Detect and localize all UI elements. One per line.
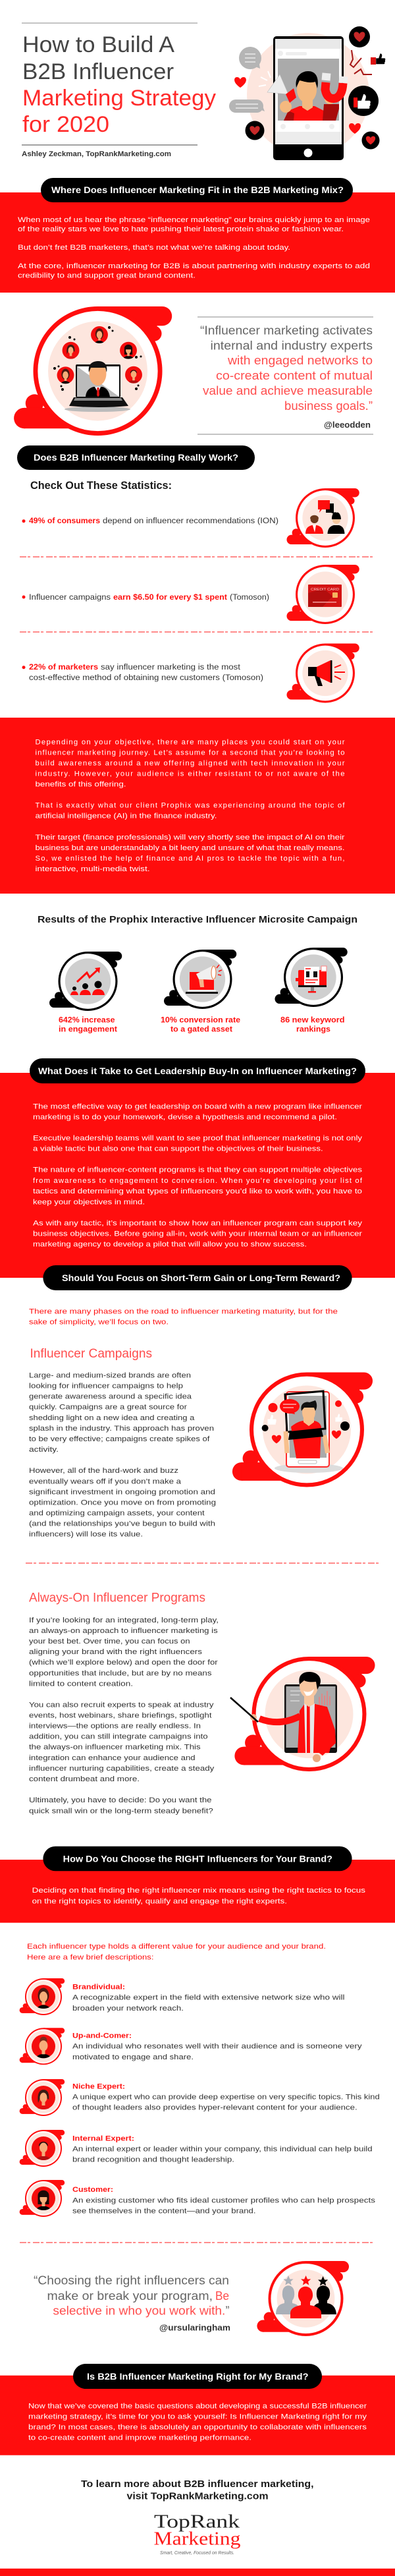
result 1: engagement [49, 952, 122, 1034]
section heading pill [43, 1846, 352, 1871]
laptop with speaker [65, 361, 130, 412]
text block: always-on [29, 1617, 219, 1815]
title: red lines: for 2020 [22, 112, 109, 137]
section heading pill: Where Does Influencer Marketing Fit in the B2B Marketing Mix? [51, 185, 344, 195]
call to action [81, 2478, 313, 2502]
stat 2: campaign earnings: earn $6.50 for every $1 spent [113, 592, 227, 602]
influencer type: Up-and-Comer: Up-and-Comer: [72, 2032, 132, 2040]
influencer type: Brandividual: Brandividual: [72, 1984, 125, 1991]
icon: three people with stars [257, 2261, 349, 2336]
section heading pill: short vs long term [43, 1265, 352, 1290]
subheading: Always-On Influencer Programs: Always-On Influencer Programs [29, 1591, 205, 1605]
stat 3: marketers [22, 662, 263, 682]
text block: always-on: interviews—the options are really endless. In [29, 1723, 201, 1731]
icon: growth chart with people [49, 952, 122, 1011]
influencer type: Customer [20, 2180, 375, 2217]
buy-in paragraphs: business objectives. Before going all-in, work with your internal team or an influencer [33, 1230, 362, 1238]
influencer type: Internal Expert [20, 2130, 373, 2167]
section heading pill: short vs long term: Should You Focus on Short-Term Gain or Long-Term Reward? [62, 1273, 340, 1283]
band text [32, 1887, 365, 1905]
case study paragraphs: Their target (finance professionals) will very shortly see the impact of AI on their [36, 834, 345, 842]
intro paragraphs [18, 216, 370, 279]
text block: campaigns: generate awareness around a specific idea [29, 1393, 192, 1401]
author byline: Ashley Zeckman, TopRankMarketing.com [22, 150, 171, 158]
icon: presenter with pointer and tablet [230, 1657, 375, 1771]
text block: always-on: If you’re looking for an integrated, long-term play, [29, 1617, 219, 1624]
text block: always-on: (which we’ll explore below) and open the door for [29, 1659, 218, 1667]
case study paragraphs: industry. However, your audience is either resistant to or not aware of the [36, 770, 344, 778]
text block: always-on: integration can enhance your audience and [29, 1754, 196, 1762]
quote text: value and achieve measurable [203, 384, 373, 397]
text block: campaigns: eventually wears off if you don’t make a [29, 1477, 182, 1485]
footer red band [0, 2569, 395, 2576]
logo: TopRank Marketing: TopRank [154, 2511, 240, 2533]
decorative divider [20, 631, 374, 633]
red intro text: There are many phases on the road to influencer marketing maturity, but for the [29, 1307, 338, 1315]
result label: rankings [296, 1025, 330, 1034]
call to action: visit TopRankMarketing.com [126, 2490, 269, 2502]
section heading pill: does it work: Does B2B Influencer Marketing Really Work? [34, 452, 238, 463]
magnet [325, 73, 344, 98]
influencer figure [280, 71, 339, 121]
decorative divider [26, 1562, 380, 1564]
text block: campaigns [29, 1371, 216, 1538]
buy-in paragraphs: a viable tactic but also one that can support the objectives of their business. [33, 1145, 323, 1153]
text block: campaigns: to be very effective; campaigns create spikes of [29, 1435, 210, 1443]
text block: always-on: limited to content creation. [29, 1680, 133, 1688]
quote text: Be [215, 2289, 229, 2303]
floating social icons [262, 1399, 350, 1443]
text block: campaigns: significant investment in ongoing promotion and [29, 1488, 215, 1496]
red band: intro section [0, 178, 395, 293]
tablet [284, 1684, 337, 1753]
band text: Now that we’ve covered the basic questions about developing a successful B2B influencer [28, 2402, 367, 2410]
stat 1: consumers [22, 516, 278, 525]
influencer type: Up-and-Comer [20, 2028, 362, 2065]
decorative divider [20, 2242, 374, 2243]
buy-in paragraphs: marketing agency to develop a pilot that will allow you to show success. [33, 1241, 307, 1249]
band text [28, 2402, 367, 2442]
band text: marketing strategy, it’s time for you to ask yourself: Is Influencer Marketing right for my [28, 2413, 367, 2421]
band text: to co-create content and improve marketing performance. [28, 2434, 251, 2442]
title: dark lines [22, 32, 174, 84]
result label: 642% increase [59, 1016, 115, 1025]
icon: thumbs up badges [348, 53, 385, 116]
small influencer avatars [57, 326, 142, 384]
text block: always-on: addition, you can still integrate campaigns into [29, 1733, 208, 1741]
stat 3: marketers: cost-effective method of obtaining new customers (Tomoson) [29, 673, 263, 682]
intro paragraphs: of the reality stars we love to hate pushing their latest protein shake or fashion wear. [18, 225, 344, 233]
stat 2: campaign earnings: Influencer campaigns [29, 592, 111, 602]
intro paragraphs: At the core, influencer marketing for B2B is about partnering with industry experts to add [18, 262, 370, 270]
icon: avatar [20, 2028, 65, 2065]
influencer type: Internal Expert: An internal expert or leader within your company, this individual can help build [72, 2145, 373, 2153]
section heading pill: does it work [17, 445, 255, 470]
text block: always-on: an always-on approach to influencer marketing is [29, 1627, 218, 1635]
quote text: internal and industry experts [211, 339, 373, 352]
case study paragraphs: So, we enlisted the help of finance and AI pros to tackle the topic with a fun, [36, 855, 344, 863]
pull quote: Ursula Ringham [34, 2274, 230, 2333]
intro paragraphs: But don’t fret B2B marketers, that’s not what we’re talking about today. [18, 244, 290, 252]
subheading: statistics: Check Out These Statistics: [30, 479, 172, 492]
section heading pill [41, 178, 353, 202]
title: dark lines: How to Build A [22, 32, 174, 57]
influencer type: Internal Expert: Internal Expert: [72, 2134, 134, 2142]
stat 2: campaign earnings [22, 592, 269, 602]
influencer type: Customer: An existing customer who fits ideal customer profiles who can help prospects [72, 2196, 375, 2204]
red band: leadership buy-in [0, 1058, 395, 1278]
quote text: co-create content of mutual [216, 369, 373, 382]
section heading pill [30, 1058, 365, 1083]
text block: always-on: content drumbeat and more. [29, 1775, 140, 1783]
influencer type: Brandividual [20, 1978, 344, 2015]
influencer type: Customer: Customer: [72, 2186, 113, 2194]
presenter [230, 1672, 336, 1762]
buy-in paragraphs: The most effective way to get leadership on board with a new program like influencer [33, 1102, 362, 1110]
icon: heart badges [234, 26, 379, 149]
result label [59, 1016, 117, 1034]
icon: credit card: CREDIT CARD [311, 588, 339, 592]
influencer type: Customer: see themselves in the content—and your brand. [72, 2208, 255, 2216]
quote text [34, 2274, 229, 2318]
case study paragraphs: influencer marketing journey. Let’s assume for a second that you’re looking to [36, 749, 345, 757]
icon: influencer network around laptop [14, 306, 172, 436]
text block: campaigns: and optimizing campaign assets, your content [29, 1509, 205, 1517]
influencer type: Niche Expert: Niche Expert: [72, 2082, 125, 2090]
icon: avatar [20, 2180, 65, 2217]
buy-in paragraphs: from awareness to engagement to conversion. When you’re developing your list of [33, 1177, 363, 1185]
text block: campaigns: quickly. Campaigns are a great source for [29, 1404, 187, 1412]
logo: TopRank Marketing: Marketing [154, 2529, 241, 2550]
quote text: make or break your program, [47, 2289, 213, 2303]
influencer type: Up-and-Comer: An individual who resonates well with their audience and is someone very [72, 2043, 362, 2051]
icon: laptop megaphone [164, 950, 236, 1009]
stat 1: consumers: depend on influencer recommendations (ION) [103, 516, 278, 525]
stat 3: marketers: 22% of marketers [29, 662, 98, 672]
text block: always-on: Ultimately, you have to decide: Do you want the [29, 1796, 212, 1804]
intro to influencer types [27, 1943, 326, 1961]
text block: campaigns: looking for influencer campaigns to help [29, 1383, 183, 1390]
title: red lines [22, 86, 216, 137]
quote text [200, 324, 373, 413]
stat 1: consumers: 49% of consumers [29, 516, 100, 525]
logo: TopRank Marketing [154, 2511, 241, 2556]
icon: monitor with article [275, 948, 348, 1007]
buy-in paragraphs: The nature of influencer-content programs is that they can support multiple objectives [33, 1166, 362, 1174]
icon: people talking [287, 488, 359, 548]
title block [22, 22, 216, 158]
section heading pill: Is B2B Influencer Marketing Right for My Brand? [87, 2371, 308, 2382]
text block: always-on: the always-on influencer marketing mix. This [29, 1744, 201, 1752]
intro to influencer types: Here are a few brief descriptions: [27, 1953, 154, 1961]
text block: campaigns: activity. [29, 1446, 59, 1454]
text block: campaigns: influencers) will lose its value. [29, 1530, 143, 1538]
result label: to a gated asset [171, 1025, 232, 1034]
intro paragraphs: credibility to and support great brand content. [18, 272, 196, 279]
phone [273, 36, 344, 160]
red band: choosing influencers [0, 1846, 395, 1923]
megaphone [259, 71, 296, 103]
intro to influencer types: Each influencer type holds a different value for your audience and your brand. [27, 1943, 326, 1951]
case study paragraphs [36, 738, 345, 873]
text block: always-on: You can also recruit experts to speak at industry [29, 1701, 214, 1709]
stat 3: marketers: say influencer marketing is the most [101, 662, 241, 672]
influencer type: Internal Expert: brand recognition and thought leadership. [72, 2156, 234, 2163]
icon: avatar [20, 2079, 65, 2116]
red band: Prophix case study [0, 718, 395, 894]
text block: always-on: your best bet. Over time, you can focus on [29, 1638, 190, 1646]
icon: credit card [287, 565, 359, 624]
quote handle: @leeodden [324, 420, 371, 430]
quote text: “Influencer marketing activates [200, 324, 373, 337]
buy-in paragraphs: As with any tactic, it’s important to show how an influencer program can support key [33, 1219, 362, 1227]
buy-in paragraphs: Executive leadership teams will want to see proof that influencer marketing is not only [33, 1135, 362, 1143]
quote text: ” [225, 2304, 229, 2318]
intro paragraphs: When most of us hear the phrase “influencer marketing” our brains quickly jump to an image [18, 216, 370, 224]
person with sign [286, 1400, 328, 1458]
influencer type: Brandividual: A recognizable expert in the field with extensive network size who will [72, 1994, 345, 2002]
influencer type: Niche Expert [20, 2079, 380, 2116]
hero illustration: phone with influencer [229, 26, 385, 160]
case study paragraphs: Depending on your objective, there are many places you could start on your [36, 738, 345, 746]
result 2: conversion [161, 950, 240, 1034]
result label: 10% conversion rate [161, 1016, 240, 1025]
text block: always-on: aligning your brand with the right influencers [29, 1648, 202, 1656]
influencer type: Niche Expert: of thought leaders also provides hyper-relevant content for your audience. [72, 2104, 357, 2112]
buy-in paragraphs: keep your objectives in mind. [33, 1198, 145, 1206]
result label [280, 1016, 345, 1034]
buy-in paragraphs: tactics and determining what types of influencers you’d like to work with, you have to [33, 1188, 362, 1195]
case study paragraphs: That is exactly what our client Prophix was experiencing around the topic of [36, 802, 345, 810]
quote text: selective in who you work with. [53, 2304, 225, 2318]
band text: on the right topics to identify, qualify and engage the right experts. [32, 1897, 287, 1905]
text block: always-on: opportunities that include, but are by no means [29, 1669, 212, 1677]
call to action: To learn more about B2B influencer marketing, [81, 2478, 313, 2490]
case study paragraphs: benefits of this offering. [36, 780, 126, 788]
influencer type: Up-and-Comer: motivated to engage and share. [72, 2053, 194, 2061]
band text: Deciding on that finding the right influencer mix means using the right tactics to focus [32, 1887, 365, 1895]
heading: campaign results: Results of the Prophix Interactive Influencer Microsite Campaign [38, 914, 357, 925]
phone [285, 1391, 329, 1467]
quote text: with engaged networks to [227, 354, 373, 367]
text block: always-on: events, host webinars, share briefings, spotlight [29, 1711, 212, 1719]
quote text: business goals.” [284, 399, 373, 413]
buy-in paragraphs: marketing is to do your homework, devise a hypothesis and recommend a pilot. [33, 1114, 337, 1122]
text block: campaigns: Large- and medium-sized brands are often [29, 1371, 191, 1379]
buy-in paragraphs [33, 1102, 363, 1249]
result label: in engagement [59, 1025, 117, 1034]
title: dark lines: B2B Influencer [22, 59, 174, 84]
section heading pill [73, 2364, 322, 2389]
text block: always-on: influencer nurturing capabilities, create a steady [29, 1765, 215, 1773]
icon: chat bubbles [229, 47, 265, 113]
text block: campaigns: However, all of the hard-work and buzz [29, 1467, 178, 1475]
case study paragraphs: artificial intelligence (AI) in the finance industry. [36, 813, 217, 820]
influencer type: Niche Expert: A unique expert who can provide deep expertise on very specific topics. This kind [72, 2094, 380, 2102]
quote text: “Choosing the right influencers can [34, 2274, 229, 2287]
stat 2: campaign earnings: (Tomoson) [230, 592, 269, 602]
red band: final question [0, 2364, 395, 2455]
text block: campaigns: shedding light on a new idea and creating a [29, 1414, 195, 1422]
section heading pill: How Do You Choose the RIGHT Influencers for Your Brand? [63, 1853, 332, 1864]
band text: brand? In most cases, there is absolutely an opportunity to collaborate with influencers [28, 2424, 367, 2432]
result label: 86 new keyword [280, 1016, 345, 1025]
result 3: keyword rankings [275, 948, 348, 1034]
icon: avatar [20, 2130, 65, 2167]
text block: campaigns: (and the relationships you’ve begun to build with [29, 1520, 215, 1528]
text block: campaigns: optimization. Once you move on from promoting [29, 1499, 216, 1506]
icon: avatar [20, 1978, 65, 2015]
decorative divider [20, 556, 374, 558]
case study paragraphs: business but are understandably a bit leery and unsure of what that really means. [36, 844, 345, 852]
red intro text: sake of simplicity, we’ll focus on two. [29, 1318, 169, 1326]
icon: influencer holding phone frame [232, 1372, 373, 1487]
decorative dots [53, 326, 142, 391]
influencer type: Brandividual: broaden your network reach. [72, 2005, 184, 2013]
text block: always-on: quick small win or the long-term steady benefit? [29, 1807, 213, 1815]
case study paragraphs: interactive, multi-media twist. [36, 865, 150, 873]
subheading: Influencer Campaigns: Influencer Campaigns [30, 1346, 152, 1361]
title: red lines: Marketing Strategy [22, 86, 216, 111]
icon: megaphone [287, 643, 359, 702]
decorative connector squiggles [350, 50, 372, 74]
section heading pill: What Does it Take to Get Leadership Buy-In on Influencer Marketing? [38, 1066, 357, 1076]
logo: TopRank Marketing: Smart, Creative, Focused on Results. [160, 2551, 234, 2556]
text block: campaigns: splash in the industry. This approach has proven [29, 1425, 214, 1433]
result label [161, 1016, 240, 1034]
case study paragraphs: build awareness around a new offering aligned with tech innovation in your [36, 759, 345, 767]
pull quote: Lee Odden [198, 316, 373, 435]
red intro text [29, 1307, 338, 1326]
quote handle: @ursularingham [159, 2324, 230, 2333]
